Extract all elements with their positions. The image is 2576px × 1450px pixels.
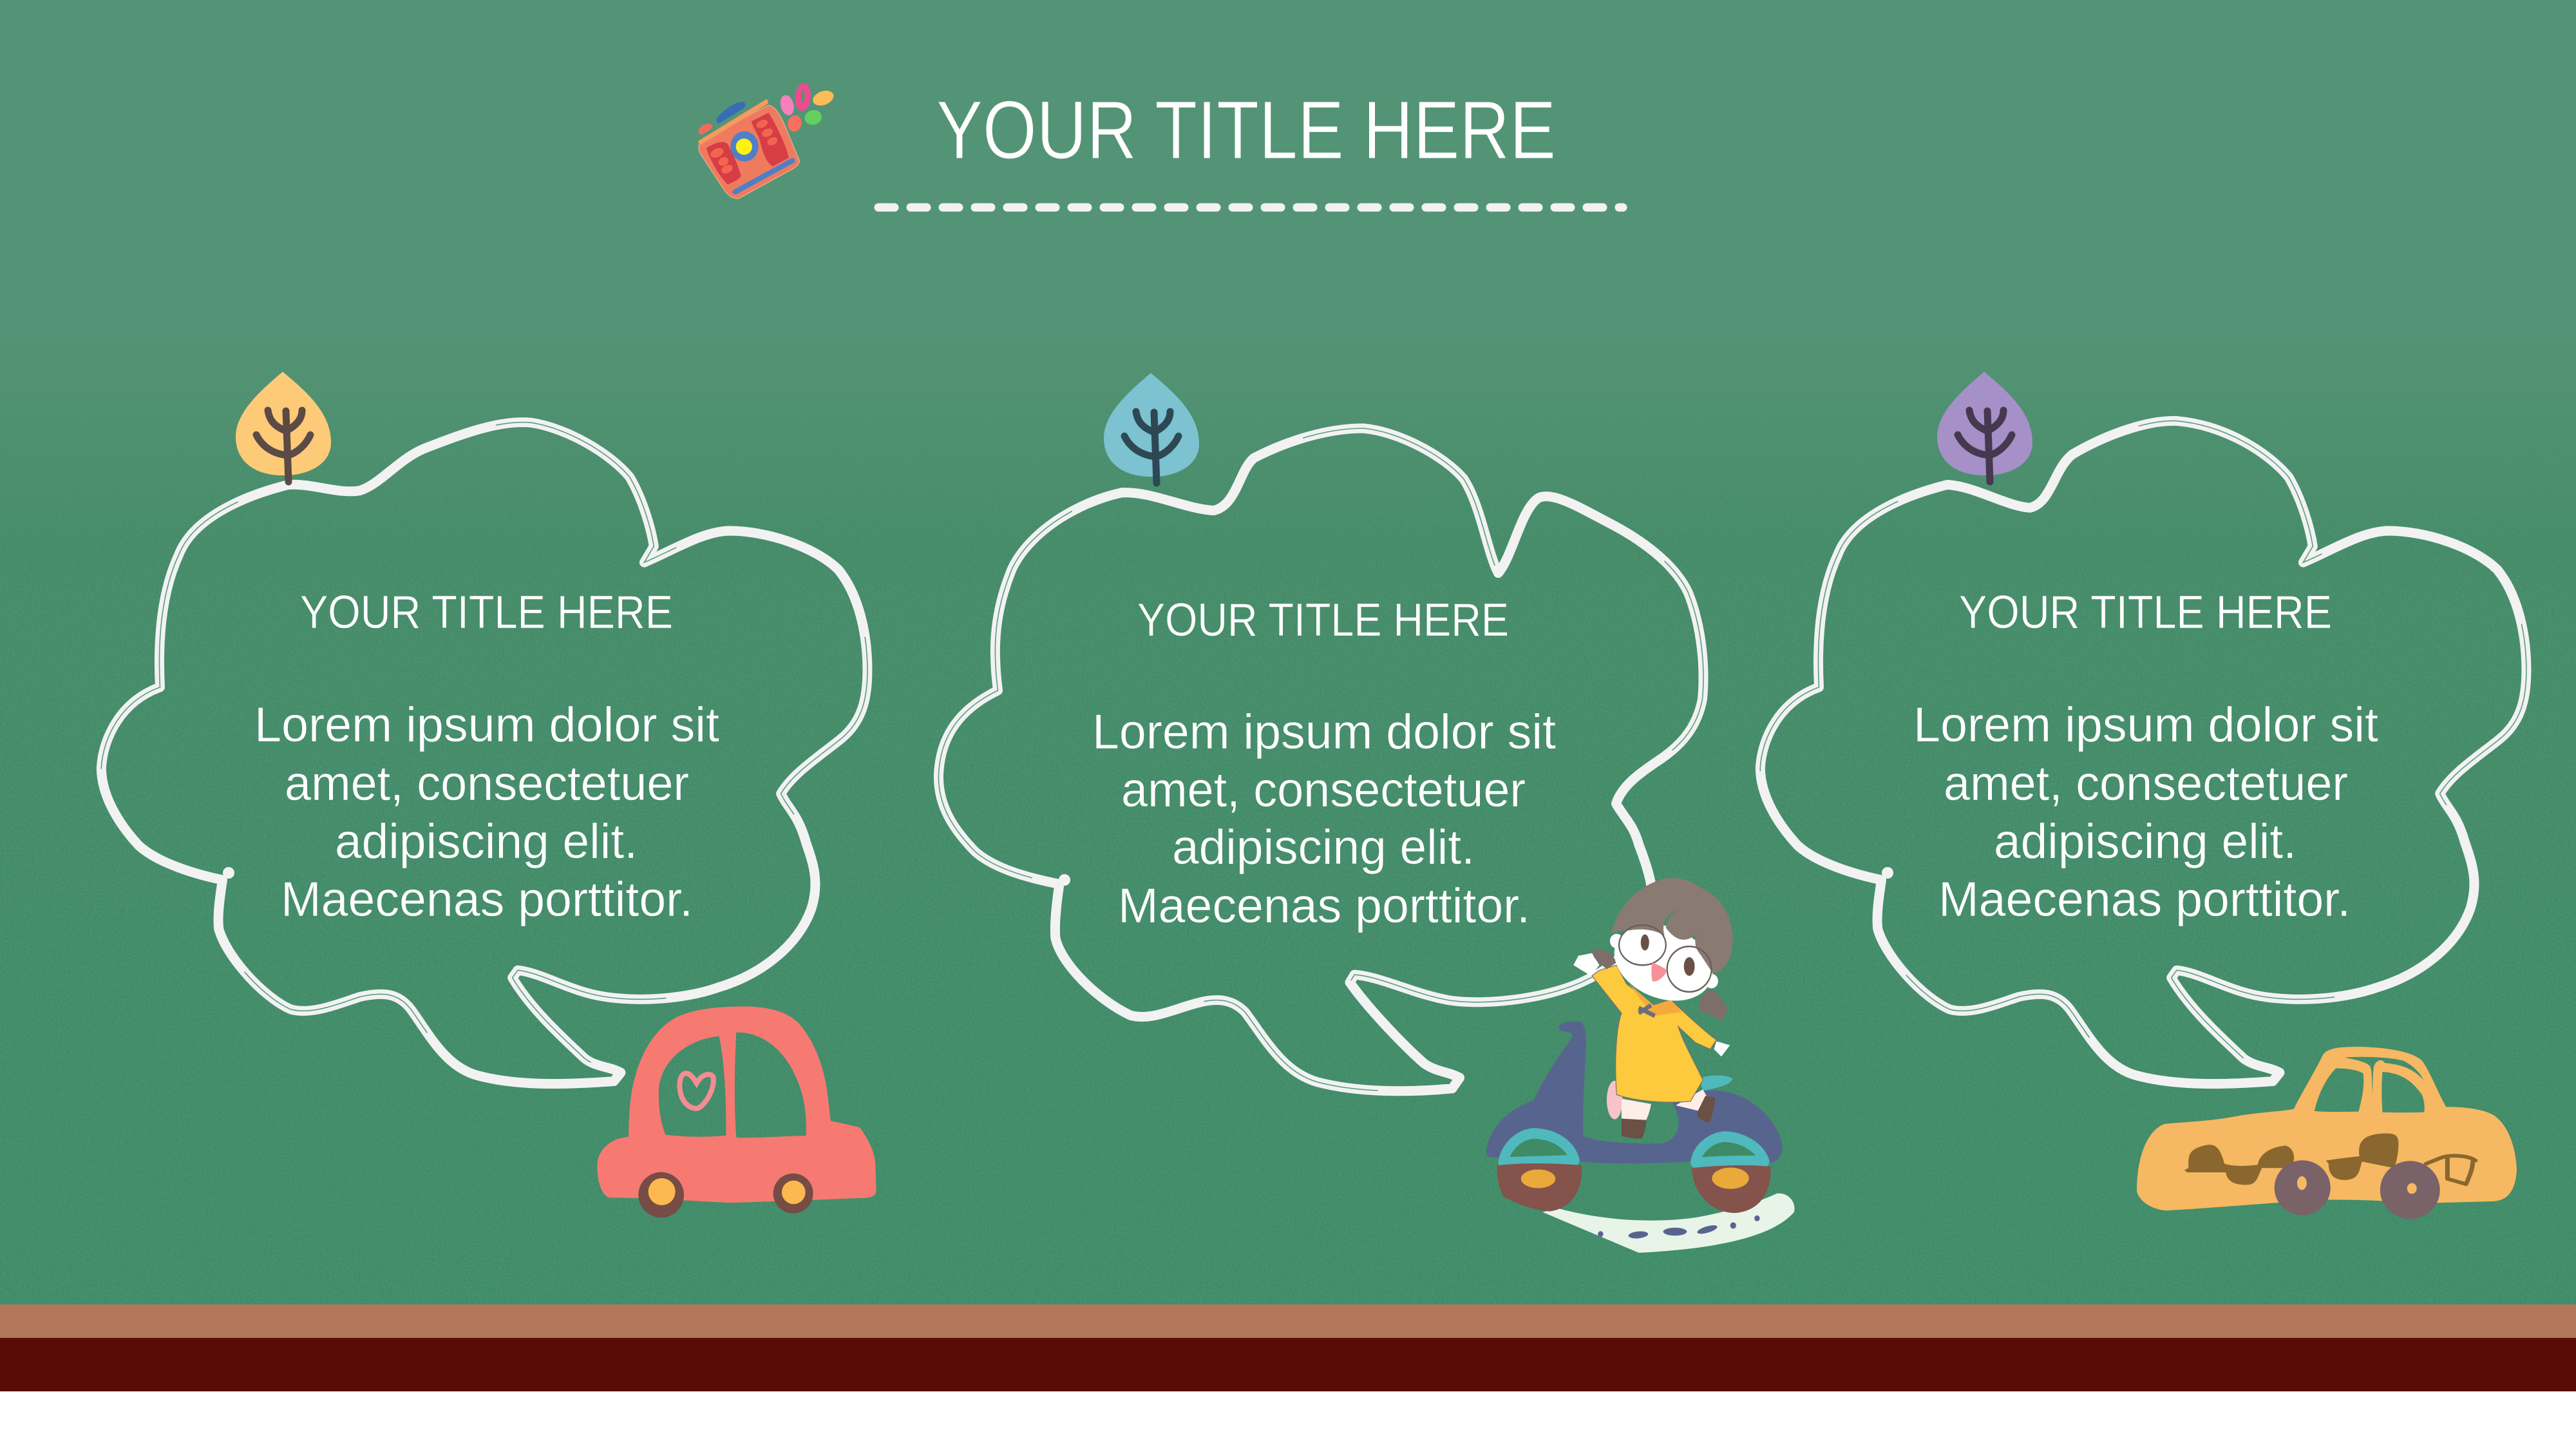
- bubble knot: [1059, 874, 1070, 886]
- body text: amet, consectetuer: [1944, 756, 2348, 811]
- background texture: [0, 560, 2575, 1304]
- panel: left speech bubble: [101, 423, 867, 1084]
- bubble outline: [938, 428, 1703, 1091]
- body text: Lorem ipsum dolor sit: [1913, 698, 2378, 752]
- heading: YOUR TITLE HERE: [300, 587, 673, 638]
- body text: adipiscing elit.: [1172, 820, 1475, 875]
- icon: blue leaf: [1104, 373, 1199, 483]
- bubble knot: [1882, 867, 1893, 879]
- body text: amet, consectetuer: [1121, 763, 1526, 817]
- scooter: [1486, 1021, 1783, 1213]
- chalk tray: [0, 1304, 2576, 1338]
- girl: [1573, 878, 1733, 1139]
- heading: YOUR TITLE HERE: [1959, 587, 2332, 638]
- road marks: [1598, 1216, 1760, 1239]
- body text: amet, consectetuer: [285, 756, 689, 811]
- body text: Maecenas porttitor.: [1118, 879, 1530, 933]
- bubble outline: [101, 423, 867, 1084]
- title: YOUR TITLE HERE: [936, 84, 1556, 176]
- body text: Lorem ipsum dolor sit: [254, 698, 719, 752]
- icon: girl on scooter: [1486, 878, 1795, 1253]
- body text: adipiscing elit.: [335, 814, 638, 869]
- panel: right speech bubble: [1760, 421, 2526, 1084]
- icon: yellow taxi: [2137, 1047, 2517, 1219]
- body text: [1913, 698, 2378, 927]
- road: [1542, 1194, 1795, 1253]
- bubble knot: [223, 867, 234, 879]
- icon: yellow leaf: [236, 372, 331, 482]
- icon: purple leaf: [1937, 372, 2032, 482]
- title dashed underline: [878, 204, 1623, 211]
- panel: middle speech bubble: [938, 428, 1703, 1091]
- body text: Maecenas porttitor.: [281, 872, 693, 927]
- board base: [0, 1338, 2576, 1391]
- body text: Lorem ipsum dolor sit: [1092, 705, 1556, 759]
- body text: adipiscing elit.: [1994, 814, 2297, 869]
- body text: Maecenas porttitor.: [1938, 872, 2351, 927]
- heading: YOUR TITLE HERE: [1137, 595, 1509, 646]
- bubble outline: [1760, 421, 2526, 1084]
- body text: [254, 698, 719, 927]
- body text: [1092, 705, 1556, 933]
- icon: red car: [597, 1007, 876, 1217]
- icon: camera: [698, 82, 836, 198]
